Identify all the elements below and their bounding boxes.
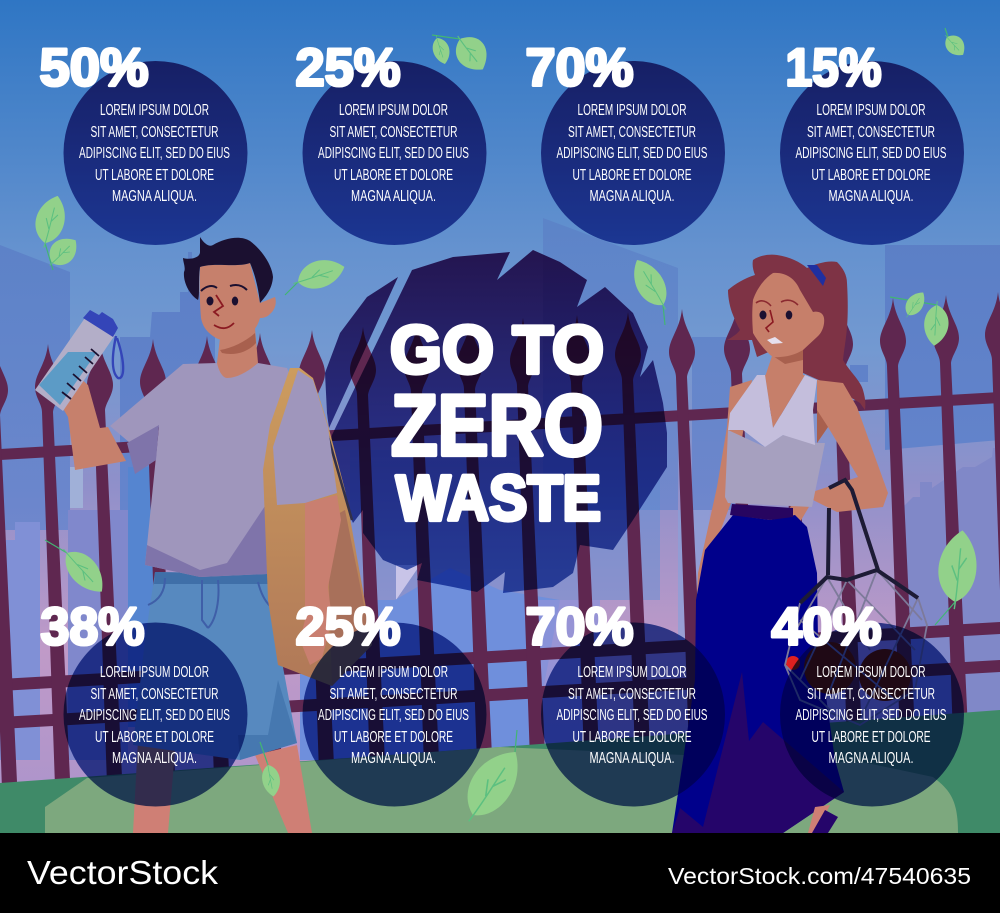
woman blouse [725, 375, 825, 507]
description: MAGNA ALIQUA. [590, 188, 674, 205]
panel: stat 40% [772, 598, 964, 806]
description: SIT AMET, CONSECTETUR [807, 686, 935, 703]
panel: stat 25% top [296, 38, 486, 245]
description [796, 102, 946, 205]
circle [541, 61, 725, 245]
panel: stat 25% bottom [296, 598, 486, 806]
description: UT LABORE ET DOLORE [334, 729, 453, 746]
description: UT LABORE ET DOLORE [95, 167, 214, 184]
woman foot [808, 805, 838, 833]
string bag [785, 480, 927, 725]
circle [64, 61, 248, 245]
description [556, 102, 708, 205]
description: SIT AMET, CONSECTETUR [90, 124, 218, 141]
panel: stat 50% [40, 38, 248, 245]
description: LOREM IPSUM DOLOR [100, 102, 209, 119]
footer logo: VectorStock [27, 854, 219, 891]
description: LOREM IPSUM DOLOR [816, 102, 926, 119]
man raised arm [55, 360, 126, 470]
description: LOREM IPSUM DOLOR [578, 102, 686, 119]
description: MAGNA ALIQUA. [590, 750, 674, 767]
description: UT LABORE ET DOLORE [95, 729, 214, 746]
title [390, 312, 604, 534]
panel: stat 70% bottom [526, 598, 725, 806]
woman hair band [807, 265, 826, 286]
man right arm and sleeve [273, 370, 341, 665]
man figure [35, 237, 372, 833]
title: ZERO [391, 378, 603, 474]
woman skirt [672, 504, 844, 833]
description: SIT AMET, CONSECTETUR [330, 124, 458, 141]
woman hair [727, 255, 865, 410]
value: 70% [526, 38, 634, 98]
value: 25% [296, 38, 400, 98]
description [79, 102, 230, 205]
woman face [752, 273, 824, 377]
description: LOREM IPSUM DOLOR [100, 664, 209, 681]
title: GO TO [390, 312, 604, 388]
man t-shirt [110, 363, 300, 577]
description: MAGNA ALIQUA. [112, 750, 197, 767]
description: MAGNA ALIQUA. [351, 188, 436, 205]
description: MAGNA ALIQUA. [351, 750, 436, 767]
panel: stat 15% [780, 38, 964, 245]
circle [780, 622, 964, 806]
description: UT LABORE ET DOLORE [812, 729, 930, 746]
value: 50% [40, 38, 148, 98]
man shoulder bag [263, 368, 372, 686]
panel: stat 70% top [526, 38, 725, 245]
description: MAGNA ALIQUA. [828, 750, 914, 767]
value: 15% [786, 38, 882, 98]
title backdrop blob [325, 250, 667, 593]
city skyline [0, 218, 1000, 760]
footer url: VectorStock.com/47540635 [668, 863, 971, 889]
water bottle [35, 310, 123, 411]
value: 38% [40, 598, 144, 656]
description: SIT AMET, CONSECTETUR [330, 686, 458, 703]
description: UT LABORE ET DOLORE [812, 167, 930, 184]
ground [0, 710, 1000, 833]
circle [780, 61, 964, 245]
description [318, 664, 469, 767]
description: SIT AMET, CONSECTETUR [568, 686, 696, 703]
man head [183, 237, 276, 378]
description: ADIPISCING ELIT, SED DO EIUS [318, 707, 469, 724]
man shorts [133, 572, 297, 760]
description: ADIPISCING ELIT, SED DO EIUS [556, 707, 708, 724]
title: WASTE [396, 462, 601, 534]
description [79, 664, 230, 767]
iron fence [0, 292, 1000, 847]
description [318, 102, 469, 205]
value: 25% [296, 598, 400, 656]
description: SIT AMET, CONSECTETUR [568, 124, 696, 141]
description: MAGNA ALIQUA. [828, 188, 914, 205]
woman figure [672, 255, 927, 833]
description: SIT AMET, CONSECTETUR [90, 686, 218, 703]
woman arms and torso skin [697, 375, 888, 593]
description: MAGNA ALIQUA. [112, 188, 197, 205]
circle [541, 622, 725, 806]
circle [302, 61, 486, 245]
description: UT LABORE ET DOLORE [572, 729, 692, 746]
panel: stat 38% [40, 598, 248, 806]
value: 40% [772, 598, 882, 656]
description: LOREM IPSUM DOLOR [816, 664, 926, 681]
circle [64, 622, 248, 806]
description: ADIPISCING ELIT, SED DO EIUS [318, 145, 469, 162]
description: UT LABORE ET DOLORE [334, 167, 453, 184]
description: LOREM IPSUM DOLOR [339, 102, 448, 119]
description [796, 664, 946, 767]
description: SIT AMET, CONSECTETUR [807, 124, 935, 141]
value: 70% [526, 598, 634, 656]
description: ADIPISCING ELIT, SED DO EIUS [79, 145, 230, 162]
man legs [133, 740, 312, 833]
description: LOREM IPSUM DOLOR [339, 664, 448, 681]
description [556, 664, 708, 767]
description: UT LABORE ET DOLORE [572, 167, 692, 184]
description: ADIPISCING ELIT, SED DO EIUS [556, 145, 708, 162]
description: ADIPISCING ELIT, SED DO EIUS [79, 707, 230, 724]
footer bar [0, 833, 1000, 913]
circle [302, 622, 486, 806]
description: LOREM IPSUM DOLOR [578, 664, 686, 681]
